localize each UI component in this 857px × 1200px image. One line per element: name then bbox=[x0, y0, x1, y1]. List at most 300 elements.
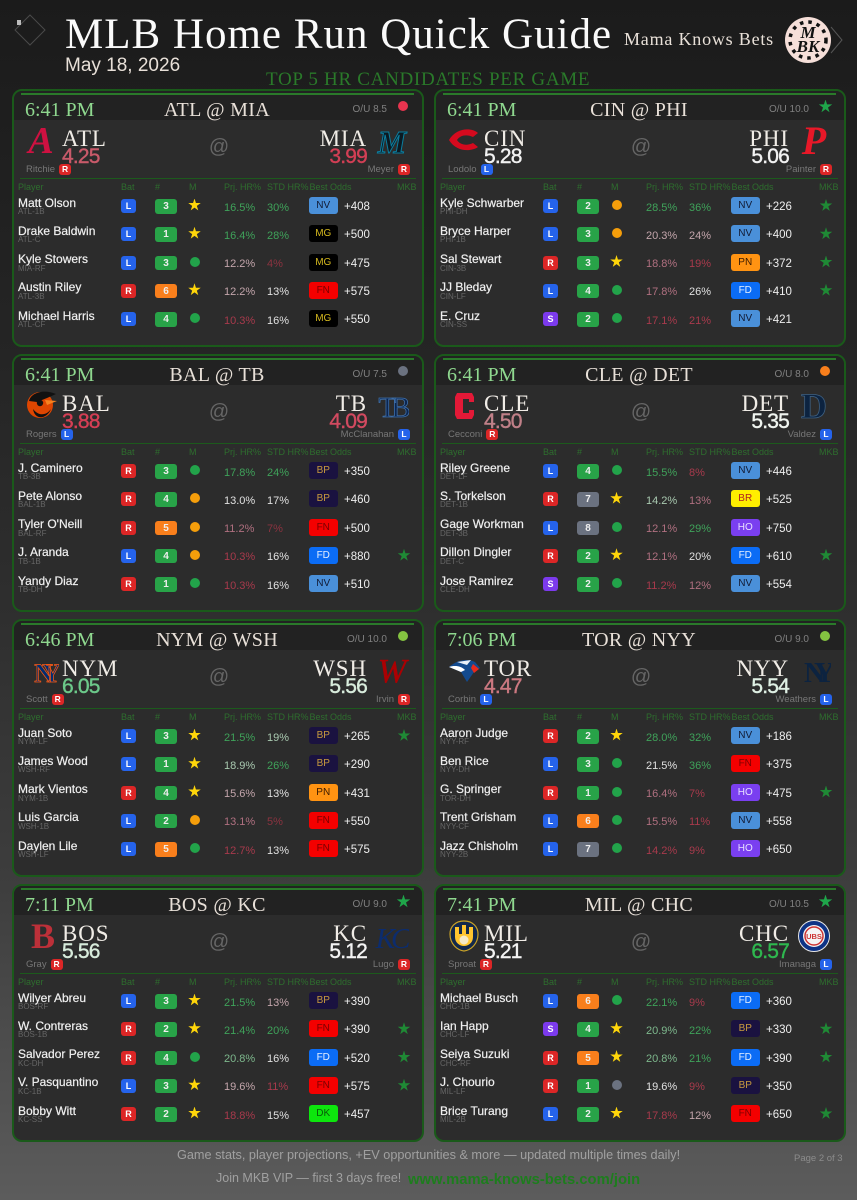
row: Bobby Witt: 18.8% bbox=[224, 1110, 255, 1122]
row: Luis Garcia: 2 bbox=[163, 816, 169, 827]
column headers: Best Odds bbox=[310, 712, 352, 722]
date: May 18, 2026 bbox=[65, 54, 180, 76]
row: Ben Rice: 21.5% bbox=[646, 760, 677, 772]
at sign: @ bbox=[631, 401, 651, 423]
panel: CIN @ PHI bbox=[434, 89, 846, 347]
row: Kyle Stowers: Kyle Stowers bbox=[18, 252, 88, 266]
row: James Wood: James Wood bbox=[18, 754, 88, 768]
home team: WSH bbox=[313, 654, 410, 705]
row: J. Aranda: TB-1B bbox=[18, 557, 41, 566]
away team: ATL bbox=[26, 124, 107, 175]
column headers: # bbox=[577, 182, 582, 192]
column headers: M bbox=[611, 447, 618, 457]
game header bbox=[14, 91, 422, 120]
row: Drake Baldwin bbox=[18, 224, 370, 244]
row: JJ Bleday: L bbox=[548, 286, 553, 296]
column headers: MKB bbox=[819, 182, 839, 192]
row: Dillon Dingler: R bbox=[547, 551, 554, 561]
row: Seiya Suzuki: 21% bbox=[689, 1053, 711, 1065]
row: J. Aranda bbox=[18, 545, 410, 566]
row: Trent Grisham: Trent Grisham bbox=[440, 810, 516, 824]
away team: ATL: 4.25 bbox=[62, 145, 100, 168]
home team: DET: L bbox=[823, 429, 829, 439]
column headers: STD HR% bbox=[267, 447, 309, 457]
row: JJ Bleday bbox=[440, 280, 832, 301]
game header: O/U 10.5 bbox=[769, 898, 809, 910]
row: Trent Grisham: 6 bbox=[585, 816, 591, 827]
row: Wilyer Abreu: BOS-RF bbox=[18, 1002, 48, 1011]
row: Riley Greene: Riley Greene bbox=[440, 460, 510, 474]
row: Mark Vientos: R bbox=[125, 788, 132, 798]
column headers: STD HR% bbox=[689, 977, 731, 987]
row: Trent Grisham: +558 bbox=[766, 816, 792, 828]
row: Seiya Suzuki: +390 bbox=[766, 1052, 792, 1064]
at sign: @ bbox=[209, 136, 229, 158]
away team: BOS: 5.56 bbox=[62, 940, 100, 963]
row: Michael Busch: Michael Busch bbox=[440, 990, 518, 1004]
row: James Wood: +290 bbox=[344, 759, 370, 771]
home team: DET: DET bbox=[742, 391, 789, 416]
away team: BAL: 3.88 bbox=[62, 410, 100, 433]
row: Juan Soto: 3 bbox=[163, 731, 169, 742]
away team: BAL bbox=[26, 391, 111, 440]
column headers bbox=[18, 447, 417, 457]
title: MLB Home Run Quick Guide bbox=[65, 11, 612, 58]
row: Aaron Judge: 28.0% bbox=[646, 732, 677, 744]
home team: CHC: 6.57 bbox=[751, 940, 789, 963]
row: Kyle Schwarber bbox=[440, 196, 832, 216]
row: Tyler O'Neill: Tyler O'Neill bbox=[18, 517, 82, 531]
brand name: Mama Knows Bets bbox=[624, 29, 774, 49]
row: Tyler O'Neill: BAL-RF bbox=[18, 528, 46, 538]
row: James Wood: L bbox=[126, 759, 131, 769]
row: Salvador Perez: KC-DH bbox=[18, 1058, 43, 1068]
row: J. Aranda: FD bbox=[317, 550, 330, 561]
row: Seiya Suzuki: Seiya Suzuki bbox=[440, 1047, 509, 1061]
row: Mark Vientos: Mark Vientos bbox=[18, 782, 88, 796]
home team: KC: 5.12 bbox=[329, 940, 367, 963]
row: E. Cruz: CIN-SS bbox=[440, 320, 467, 329]
row: Dillon Dingler: DET-C bbox=[440, 557, 464, 566]
home team: WSH: R bbox=[401, 694, 407, 704]
row: Pete Alonso: 13.0% bbox=[224, 495, 255, 507]
game header bbox=[436, 621, 844, 650]
game header: 7:11 PM bbox=[25, 894, 94, 916]
column headers: # bbox=[577, 447, 582, 457]
at sign: @ bbox=[631, 136, 651, 158]
column headers bbox=[18, 977, 417, 987]
row: Juan Soto bbox=[18, 726, 410, 746]
row: E. Cruz: E. Cruz bbox=[440, 308, 480, 322]
row: Mark Vientos bbox=[18, 782, 370, 802]
column headers: MKB bbox=[397, 182, 417, 192]
column headers: # bbox=[577, 712, 582, 722]
column headers bbox=[440, 182, 839, 192]
row: Tyler O'Neill: 7% bbox=[267, 523, 283, 535]
row: Drake Baldwin: +500 bbox=[344, 229, 370, 241]
row: Pete Alonso: 4 bbox=[163, 494, 169, 505]
away team: CIN: CIN bbox=[484, 126, 526, 151]
row: J. Caminero: J. Caminero bbox=[18, 460, 83, 474]
row: Bryce Harper: Bryce Harper bbox=[440, 224, 511, 238]
row: V. Pasquantino: 3 bbox=[163, 1081, 169, 1092]
row: Sal Stewart: 3 bbox=[585, 258, 591, 268]
row: Trent Grisham bbox=[440, 810, 792, 831]
row: Kyle Stowers: MG bbox=[315, 256, 331, 268]
subtitle: TOP 5 HR CANDIDATES PER GAME bbox=[266, 69, 590, 90]
row: V. Pasquantino: KC-1B bbox=[18, 1087, 42, 1096]
away team: NYM: Scott bbox=[26, 694, 48, 705]
column headers: # bbox=[577, 977, 582, 987]
row: Kyle Stowers: +475 bbox=[344, 258, 370, 270]
row: Matt Olson: NV bbox=[316, 200, 330, 211]
away team: TOR: L bbox=[483, 694, 489, 704]
away team: CLE: CLE bbox=[484, 391, 530, 416]
row: Jazz Chisholm: L bbox=[548, 844, 553, 854]
away team: NYM: NY bbox=[34, 659, 59, 688]
row: Brice Turang: +650 bbox=[766, 1109, 792, 1121]
row: Gage Workman: L bbox=[548, 522, 553, 532]
row: Jazz Chisholm: Jazz Chisholm bbox=[440, 838, 518, 852]
row: W. Contreras: R bbox=[125, 1024, 132, 1034]
game header: O/U 7.5 bbox=[353, 368, 387, 380]
row: Yandy Diaz: 10.3% bbox=[224, 580, 255, 592]
row: J. Chourio: 1 bbox=[585, 1081, 591, 1092]
row: J. Caminero: 3 bbox=[163, 466, 169, 477]
row: Jose Ramirez: +554 bbox=[766, 579, 792, 591]
column headers: M bbox=[611, 182, 618, 192]
row: J. Chourio: BP bbox=[739, 1080, 752, 1091]
home team: MIA: R bbox=[401, 164, 407, 174]
home team: CHC: L bbox=[823, 959, 829, 969]
row: W. Contreras: W. Contreras bbox=[18, 1019, 88, 1033]
row: Kyle Stowers: MIA-RF bbox=[18, 264, 46, 272]
panel: NYM @ WSH bbox=[12, 619, 424, 877]
game header: O/U 9.0 bbox=[775, 634, 809, 644]
row: Tyler O'Neill: +500 bbox=[344, 522, 370, 534]
row: Austin Riley: +575 bbox=[344, 286, 370, 298]
row: Pete Alonso bbox=[18, 489, 370, 509]
column headers: Best Odds bbox=[732, 712, 774, 722]
row: Mark Vientos: +431 bbox=[344, 788, 370, 800]
home team: PHI: 5.06 bbox=[751, 145, 789, 168]
row: E. Cruz: 17.1% bbox=[646, 314, 677, 326]
game header: O/U 8.0 bbox=[775, 368, 809, 380]
row: Juan Soto: BP bbox=[317, 730, 330, 741]
row: Michael Harris bbox=[18, 308, 370, 329]
row: Mark Vientos: 15.6% bbox=[224, 788, 255, 800]
game header: O/U 10.0 bbox=[347, 634, 387, 644]
game header: 6:41 PM bbox=[25, 364, 94, 386]
row: Austin Riley: R bbox=[125, 286, 132, 296]
column headers: M bbox=[189, 447, 196, 457]
row: Ben Rice: L bbox=[548, 759, 553, 769]
icon: brand logo: M bbox=[799, 23, 816, 42]
row: S. Torkelson: 14.2% bbox=[646, 495, 677, 507]
row: JJ Bleday: 26% bbox=[689, 286, 711, 298]
row: Dillon Dingler: 2 bbox=[585, 551, 591, 562]
row: Kyle Schwarber: 2 bbox=[585, 201, 591, 212]
row: J. Caminero: TB-3B bbox=[18, 472, 41, 481]
row: Bryce Harper: L bbox=[548, 229, 553, 239]
row: Jose Ramirez: Jose Ramirez bbox=[440, 574, 513, 588]
row: Yandy Diaz: TB-DH bbox=[18, 585, 42, 594]
row: G. Springer: 16.4% bbox=[646, 788, 677, 800]
home team: CHC: CHC bbox=[739, 921, 789, 946]
row: J. Chourio: +350 bbox=[766, 1081, 792, 1093]
row: Gage Workman: HO bbox=[738, 522, 753, 532]
home team: TB bbox=[329, 391, 410, 440]
row: Mark Vientos: 4 bbox=[163, 788, 169, 798]
row: Michael Harris: L bbox=[126, 314, 131, 324]
row: W. Contreras: 2 bbox=[163, 1024, 169, 1035]
row: Ian Happ bbox=[440, 1019, 832, 1039]
row: Kyle Stowers: 12.2% bbox=[224, 258, 255, 270]
home team: DET: 5.35 bbox=[751, 410, 789, 433]
row: Trent Grisham: 15.5% bbox=[646, 816, 677, 828]
row: Aaron Judge: 32% bbox=[689, 732, 711, 744]
row: Michael Harris: MG bbox=[315, 313, 331, 324]
row: Michael Busch: +360 bbox=[766, 996, 792, 1008]
row: J. Chourio bbox=[436, 1077, 844, 1105]
row: Salvador Perez: 20.8% bbox=[224, 1053, 255, 1065]
row: Kyle Schwarber: 36% bbox=[689, 202, 711, 214]
home team: PHI: Painter bbox=[786, 164, 816, 175]
row: Dillon Dingler: 20% bbox=[689, 551, 711, 563]
game header: O/U 8.5 bbox=[353, 104, 387, 114]
away team: TOR: Corbin bbox=[448, 694, 476, 705]
row: Dillon Dingler: 12.1% bbox=[646, 551, 677, 563]
row: Daylen Lile: +575 bbox=[344, 844, 370, 856]
row: Dillon Dingler bbox=[440, 545, 832, 566]
row: Tyler O'Neill: 5 bbox=[163, 522, 169, 534]
column headers: Player bbox=[440, 712, 466, 722]
row: Ian Happ: S bbox=[547, 1024, 554, 1034]
game header: O/U 9.0 bbox=[353, 898, 387, 910]
row: Gage Workman: DET-3B bbox=[440, 528, 468, 538]
home team: NYY: NYY bbox=[736, 656, 789, 681]
row: Matt Olson: 30% bbox=[267, 202, 289, 214]
home team: DET bbox=[742, 389, 832, 440]
row: Sal Stewart: Sal Stewart bbox=[440, 252, 501, 266]
row: Seiya Suzuki: 5 bbox=[585, 1052, 591, 1064]
column headers: Prj. HR% bbox=[224, 712, 261, 722]
row: Daylen Lile: WSH-LF bbox=[18, 850, 49, 859]
row: Riley Greene: +446 bbox=[766, 466, 792, 478]
column headers: # bbox=[155, 977, 160, 987]
row: Brice Turang: MIL-2B bbox=[440, 1115, 466, 1124]
away team: NYM: 6.05 bbox=[62, 675, 100, 698]
row: Wilyer Abreu bbox=[18, 990, 370, 1011]
row: V. Pasquantino bbox=[18, 1075, 410, 1096]
row: Salvador Perez: R bbox=[125, 1052, 132, 1062]
row: Wilyer Abreu: 13% bbox=[267, 996, 289, 1008]
row: Aaron Judge: NV bbox=[738, 730, 752, 741]
column headers: Bat bbox=[543, 447, 557, 457]
column headers: # bbox=[155, 182, 160, 192]
column headers: M bbox=[611, 712, 618, 722]
row: J. Caminero: 17.8% bbox=[224, 466, 255, 478]
column headers: STD HR% bbox=[689, 447, 731, 457]
row: Pete Alonso: BP bbox=[317, 493, 330, 504]
game header: 6:41 PM bbox=[447, 364, 516, 386]
column headers: Bat bbox=[121, 182, 135, 192]
row: Ian Happ: Ian Happ bbox=[440, 1019, 489, 1033]
away team: MIL bbox=[448, 920, 529, 970]
row: J. Aranda: +880 bbox=[344, 551, 370, 563]
row: G. Springer: 1 bbox=[585, 788, 591, 798]
row: Juan Soto: 19% bbox=[267, 732, 289, 744]
away team: CLE: R bbox=[489, 429, 495, 439]
away team: TOR bbox=[448, 656, 532, 705]
game header bbox=[436, 91, 844, 120]
icon: brand logo bbox=[785, 17, 842, 63]
row: G. Springer: TOR-DH bbox=[440, 794, 471, 802]
column headers: MKB bbox=[819, 447, 839, 457]
row: Sal Stewart: 18.8% bbox=[646, 258, 677, 270]
row: V. Pasquantino: L bbox=[126, 1081, 131, 1091]
row: James Wood bbox=[18, 754, 370, 774]
row: Trent Grisham: NV bbox=[738, 815, 752, 826]
row: Jose Ramirez: 12% bbox=[689, 580, 711, 592]
row: Bryce Harper: 3 bbox=[585, 229, 591, 240]
row: Juan Soto: +265 bbox=[344, 731, 370, 743]
row: Luis Garcia: +550 bbox=[344, 816, 370, 828]
home team: MIA: Meyer bbox=[368, 164, 394, 175]
row: Salvador Perez: +520 bbox=[344, 1052, 370, 1064]
row: J. Caminero: R bbox=[125, 466, 132, 476]
row: Brice Turang: L bbox=[548, 1109, 553, 1119]
column headers bbox=[440, 712, 839, 722]
row: G. Springer: +475 bbox=[766, 788, 792, 800]
row: Ian Happ: 22% bbox=[689, 1025, 711, 1037]
row: Riley Greene bbox=[440, 460, 792, 481]
row: Bobby Witt: DK bbox=[316, 1108, 330, 1119]
at sign: @ bbox=[631, 931, 651, 953]
game header: BAL @ TB bbox=[169, 364, 265, 386]
row: Brice Turang: 2 bbox=[585, 1109, 591, 1120]
row: Brice Turang bbox=[440, 1104, 832, 1124]
away team: ATL: R bbox=[62, 164, 68, 174]
row: Seiya Suzuki bbox=[440, 1047, 832, 1068]
row: Ben Rice: +375 bbox=[766, 759, 792, 771]
home team: MIA: 3.99 bbox=[329, 145, 367, 168]
row: Riley Greene: 4 bbox=[585, 466, 591, 477]
column headers: MKB bbox=[397, 977, 417, 987]
row: E. Cruz: +421 bbox=[766, 314, 792, 326]
column headers: MKB bbox=[819, 712, 839, 722]
home team: NYY: 5.54 bbox=[751, 675, 789, 698]
home team: KC bbox=[329, 921, 410, 970]
column headers: # bbox=[155, 447, 160, 457]
row: Yandy Diaz bbox=[18, 574, 370, 594]
row: Michael Harris: +550 bbox=[344, 314, 370, 326]
row: Gage Workman: +750 bbox=[766, 522, 792, 534]
row: Seiya Suzuki: R bbox=[547, 1052, 554, 1062]
game header bbox=[436, 886, 844, 915]
row: Jose Ramirez: NV bbox=[738, 578, 752, 589]
column headers: Prj. HR% bbox=[646, 712, 683, 722]
row: W. Contreras: +390 bbox=[344, 1024, 370, 1036]
row: Trent Grisham: 11% bbox=[689, 816, 710, 828]
row: S. Torkelson: S. Torkelson bbox=[440, 489, 506, 503]
row: Pete Alonso: Pete Alonso bbox=[18, 489, 82, 503]
column headers: STD HR% bbox=[267, 712, 309, 722]
row: Ben Rice: NYY-DH bbox=[440, 765, 470, 774]
row: Matt Olson: Matt Olson bbox=[18, 196, 76, 210]
row: Juan Soto: NYM-LF bbox=[18, 737, 48, 746]
away team: CLE bbox=[448, 391, 530, 440]
row: Sal Stewart: R bbox=[547, 258, 554, 268]
row: J. Chourio: J. Chourio bbox=[440, 1075, 495, 1089]
column headers: Prj. HR% bbox=[224, 182, 261, 192]
row: JJ Bleday: 4 bbox=[585, 286, 591, 297]
column headers: Bat bbox=[543, 182, 557, 192]
row: G. Springer: G. Springer bbox=[440, 782, 501, 796]
row: Kyle Stowers: 3 bbox=[163, 258, 169, 268]
row: Luis Garcia: 13.1% bbox=[224, 816, 255, 828]
row: Ian Happ: 4 bbox=[585, 1024, 591, 1035]
row: Salvador Perez: 4 bbox=[163, 1052, 169, 1064]
row: Michael Harris: Michael Harris bbox=[18, 308, 95, 322]
row: Mark Vientos: NYM-1B bbox=[18, 794, 48, 802]
game header: CIN @ PHI bbox=[590, 99, 688, 121]
row: Bobby Witt: 15% bbox=[267, 1110, 289, 1122]
row: G. Springer bbox=[440, 782, 832, 802]
column headers: Prj. HR% bbox=[224, 447, 261, 457]
row: V. Pasquantino: 19.6% bbox=[224, 1081, 255, 1093]
game header: 6:46 PM bbox=[25, 629, 94, 651]
row: Luis Garcia: FN bbox=[317, 815, 330, 826]
row: J. Chourio: 9% bbox=[689, 1081, 705, 1093]
row: Jazz Chisholm: HO bbox=[738, 843, 753, 854]
row: Brice Turang: Brice Turang bbox=[440, 1104, 508, 1118]
row: Sal Stewart: CIN-3B bbox=[440, 264, 466, 272]
home team: NYY: L bbox=[823, 694, 829, 704]
row: Michael Busch: CHC-1B bbox=[440, 1002, 470, 1011]
column headers: STD HR% bbox=[689, 182, 731, 192]
row: E. Cruz: 21% bbox=[689, 314, 711, 326]
row: G. Springer: R bbox=[547, 788, 554, 798]
row: J. Chourio: 19.6% bbox=[646, 1081, 677, 1093]
game header: O/U 10.0 bbox=[769, 104, 809, 114]
row: Jose Ramirez: 11.2% bbox=[646, 580, 676, 592]
game header: BOS @ KC bbox=[168, 894, 266, 916]
column headers: Prj. HR% bbox=[224, 977, 261, 987]
row: Daylen Lile: 5 bbox=[163, 844, 169, 855]
row: J. Aranda: 10.3% bbox=[224, 551, 255, 563]
column headers: Player bbox=[440, 182, 466, 192]
row: Bryce Harper: 20.3% bbox=[646, 230, 677, 242]
column headers bbox=[440, 447, 839, 457]
row: V. Pasquantino: 11% bbox=[267, 1081, 288, 1093]
row: Matt Olson: 3 bbox=[163, 201, 169, 212]
away team: BOS: Gray bbox=[26, 959, 47, 970]
row: Juan Soto: L bbox=[126, 731, 131, 741]
home team: TB: TB bbox=[336, 391, 367, 416]
row: G. Springer: 7% bbox=[689, 788, 705, 800]
row: Daylen Lile: 13% bbox=[267, 844, 289, 856]
row: Gage Workman: 12.1% bbox=[646, 523, 677, 535]
row: J. Aranda: 16% bbox=[267, 551, 289, 563]
row: Drake Baldwin: MG bbox=[315, 228, 331, 239]
row: Brice Turang: FN bbox=[739, 1108, 752, 1119]
row: Kyle Stowers: 4% bbox=[267, 258, 283, 270]
home team: KC: R bbox=[401, 959, 407, 969]
row: JJ Bleday: JJ Bleday bbox=[440, 280, 492, 294]
away team: TOR: 4.47 bbox=[484, 675, 522, 698]
at sign: @ bbox=[209, 931, 229, 953]
